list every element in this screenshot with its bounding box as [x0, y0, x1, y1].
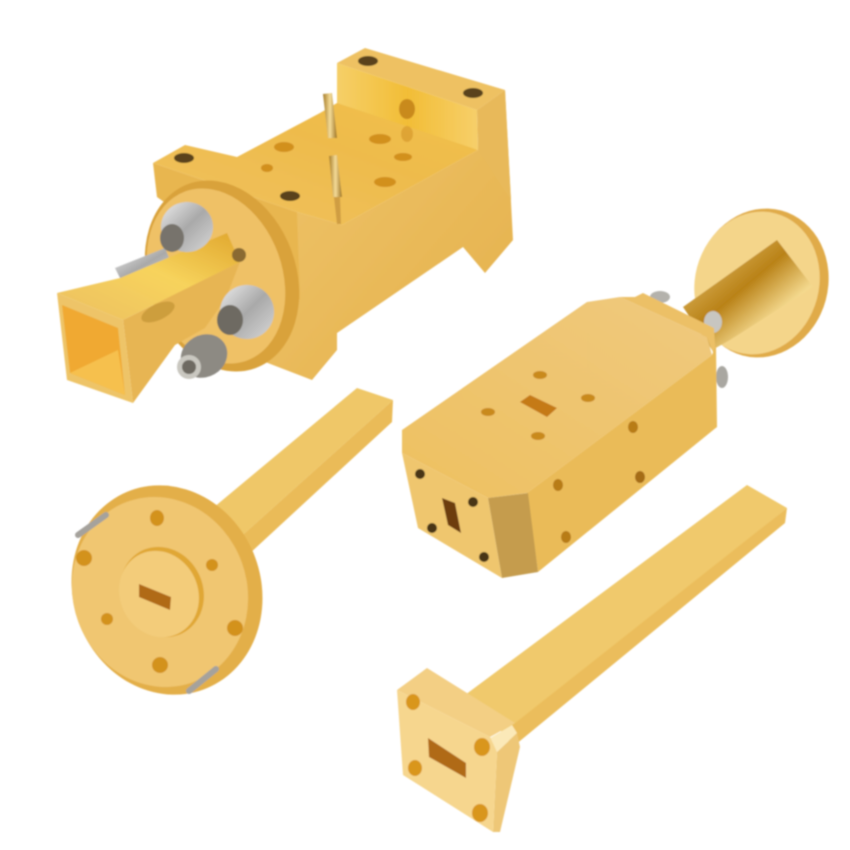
front slot: [442, 498, 461, 533]
holes: [406, 694, 420, 710]
flange side: [493, 733, 520, 832]
side holes: [628, 421, 638, 433]
horn side: [123, 262, 240, 403]
shaft side: [500, 508, 787, 745]
component: horn waveguide assembly: [57, 48, 513, 403]
right flange face: [337, 63, 478, 150]
component: flanged straight waveguide left: [42, 388, 393, 722]
block right side face: [260, 90, 513, 380]
front holes: [415, 469, 425, 479]
screw right: [220, 285, 274, 339]
right side: [527, 345, 717, 572]
component: square flanged waveguide: [397, 485, 787, 832]
shaft side: [237, 400, 393, 555]
screw bottom: [173, 326, 235, 386]
flange top strip: [397, 668, 515, 737]
block top face: [153, 103, 478, 225]
bolts: [650, 291, 670, 303]
horn front rim: [57, 293, 133, 403]
horn top: [57, 233, 240, 320]
flange rim: [42, 458, 292, 722]
aperture: [139, 584, 171, 610]
pins: [78, 515, 106, 535]
corner chamfer: [490, 725, 517, 752]
disc rim: [679, 193, 845, 373]
boss: [105, 533, 219, 651]
front face: [402, 453, 502, 578]
small stud: [232, 248, 246, 262]
flange face: [397, 690, 497, 832]
block left end: [153, 163, 300, 300]
shaft top: [207, 388, 393, 540]
shaft top: [465, 485, 787, 735]
rear screw: [115, 248, 172, 282]
horn reflection: [138, 297, 178, 327]
screw top: [161, 202, 213, 252]
flange holes: [150, 510, 164, 526]
pins: [323, 93, 337, 138]
aperture: [428, 738, 466, 778]
top face: [402, 297, 712, 498]
component: octagonal block with round flange: [402, 193, 845, 578]
waveguide tube: [683, 240, 813, 350]
block holes: [358, 56, 378, 66]
end plate: [620, 293, 716, 360]
horn opening: [62, 305, 125, 395]
chamfer: [488, 493, 538, 578]
round flange rim: [119, 159, 325, 393]
right flange edge: [477, 90, 511, 200]
flange face: [45, 472, 275, 712]
disc back face: [678, 197, 836, 369]
right flange top: [337, 48, 505, 110]
top-face holes: [520, 395, 557, 417]
round flange face: [123, 169, 309, 383]
